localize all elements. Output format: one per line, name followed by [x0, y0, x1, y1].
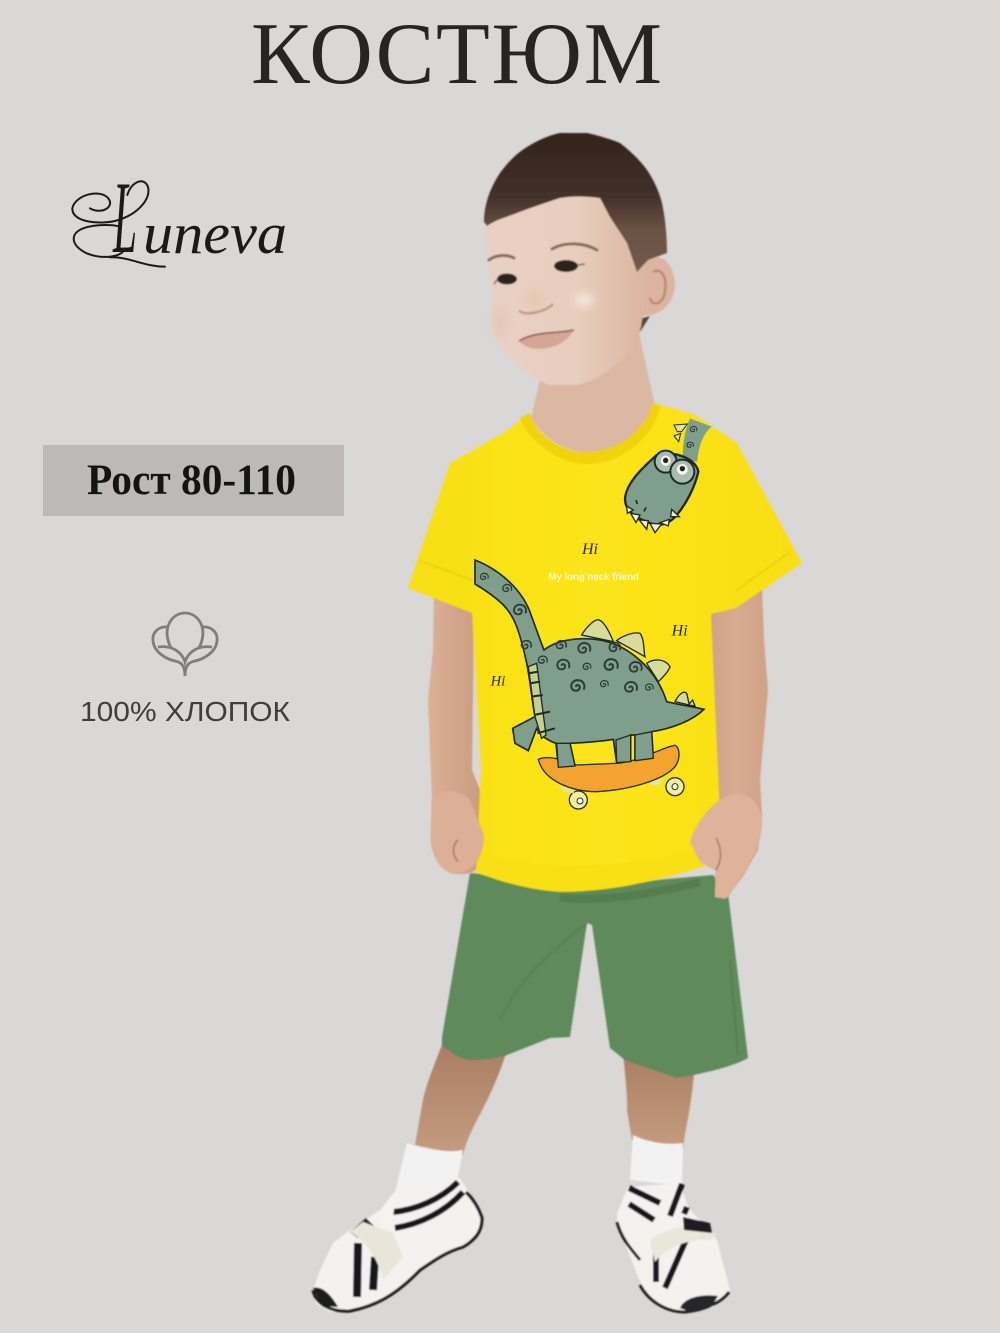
logo: Luneva: L [112, 162, 137, 275]
head [484, 133, 675, 385]
eyes [497, 274, 517, 284]
size badge [43, 445, 344, 516]
icon: cotton boll [153, 613, 217, 676]
fingers over shirt [431, 791, 762, 898]
print: dinosaurs [475, 418, 712, 809]
skateboard [538, 745, 679, 792]
neck [531, 325, 655, 453]
cheek highlight [575, 293, 593, 307]
shirt lettering: Hi [581, 541, 598, 558]
wheels [560, 778, 684, 809]
t-shirt [408, 403, 802, 892]
shirt lettering [490, 541, 688, 690]
left shoe [313, 1178, 482, 1312]
cheek shading [493, 306, 507, 338]
shirt lettering: Hi [490, 674, 505, 690]
logo: Luneva [72, 162, 287, 275]
main dino [475, 560, 704, 767]
mouth [519, 330, 574, 349]
shirt lettering: Hi [671, 622, 688, 639]
hair behind ear [636, 316, 650, 332]
nose [525, 289, 545, 307]
legs [415, 1040, 695, 1155]
socks [395, 1135, 683, 1192]
shirt lettering: My long neck friend [548, 572, 639, 583]
arms and hands [428, 585, 768, 899]
feet on board [557, 732, 653, 767]
ear [640, 257, 675, 315]
material label: 100% ХЛОПОК [80, 696, 290, 727]
logo: Luneva: uneva [143, 201, 287, 266]
size badge: Рост 80-110 [87, 457, 296, 504]
child figure [313, 133, 802, 1313]
right shoe [617, 1183, 730, 1313]
brows [489, 244, 597, 260]
title: КОСТЮМ [251, 6, 662, 103]
hair [484, 133, 667, 272]
shorts [442, 873, 748, 1078]
face [485, 186, 651, 385]
upper dino [625, 418, 712, 533]
